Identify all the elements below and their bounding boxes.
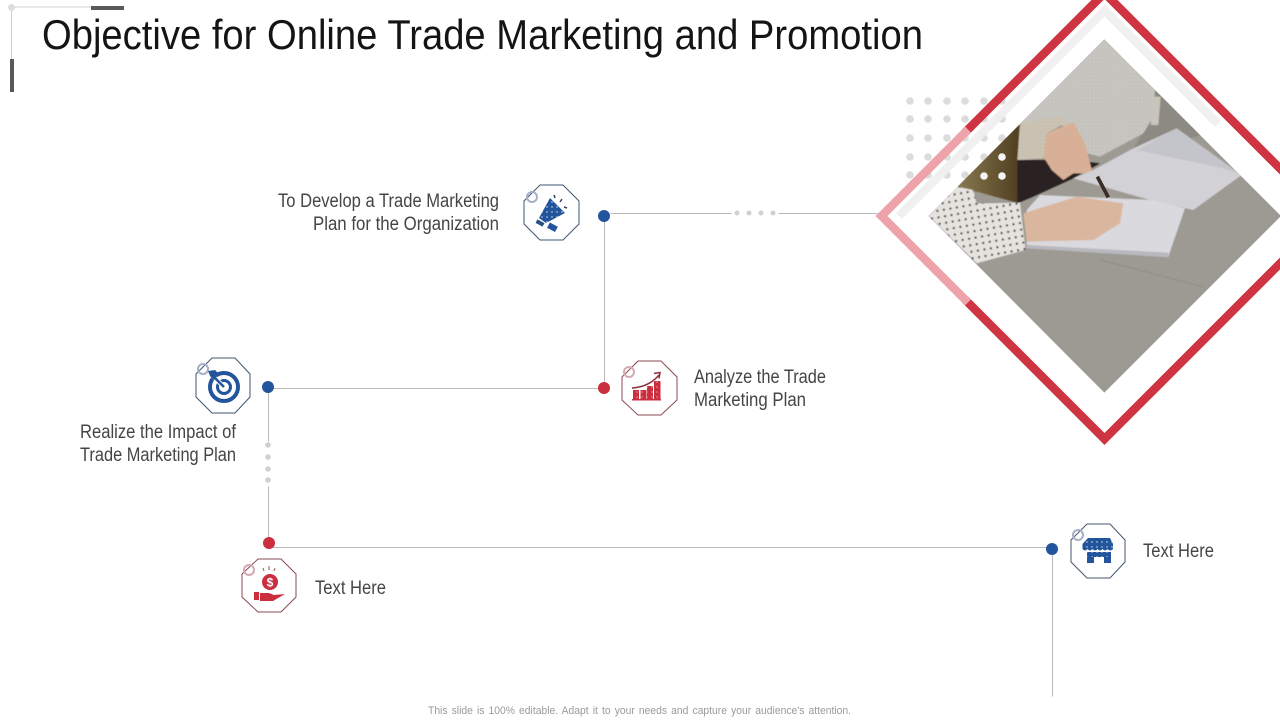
text: develop plan: Plan for the Organization: [313, 214, 499, 235]
text: here right: Text Here: [1143, 541, 1214, 562]
shirt: [1020, 39, 1155, 157]
timeline node dots: [262, 210, 1058, 555]
pen: [1097, 177, 1108, 197]
icon: megaphone badge: [524, 185, 579, 240]
icon: target badge: [196, 358, 250, 413]
text: analyze plan: Analyze the Trade: [694, 367, 826, 388]
text: analyze plan: Marketing Plan: [694, 390, 806, 411]
background behind shirt: [1130, 90, 1207, 157]
text: here left: Text Here: [315, 578, 386, 599]
upper sleeve: [1017, 117, 1068, 160]
text: realize impact: Trade Marketing Plan: [80, 445, 236, 466]
title: Objective for Online Trade Marketing and Promotion: [42, 11, 923, 58]
text: realize impact: [80, 422, 237, 466]
icon: money in hand badge: [242, 559, 296, 612]
small megaphone glyphs on line: [734, 210, 776, 216]
footer note: This slide is 100% editable. Adapt it to your needs and capture your audience's attention.: [428, 705, 851, 717]
decorative diamond frame: [882, 0, 1280, 439]
icon: growth chart badge: [622, 361, 677, 415]
text: realize impact: Realize the Impact of: [80, 422, 237, 443]
notebook: [1027, 195, 1185, 257]
connector lines: [268, 214, 1052, 696]
dotted pattern behind the diamond: [906, 97, 1006, 179]
loose papers: [1073, 128, 1242, 210]
photo: hands writing on paper at a desk: [927, 37, 1280, 395]
table crease: [1100, 260, 1203, 287]
upper hand: [1043, 122, 1093, 180]
white dots over photo: [980, 153, 1006, 180]
small bulb glyphs on line: [265, 442, 271, 483]
icon: store badge: [1071, 524, 1125, 578]
text: analyze plan: [694, 367, 826, 411]
icon: money in hand badge: $: [267, 576, 274, 590]
polka dot sleeve: [928, 187, 1026, 263]
dark shadow region: [957, 123, 1020, 203]
top-left corner accent: [8, 4, 124, 92]
text: develop plan: [278, 191, 499, 235]
writing hand: [1023, 197, 1123, 242]
text: develop plan: To Develop a Trade Marketing: [278, 191, 499, 212]
